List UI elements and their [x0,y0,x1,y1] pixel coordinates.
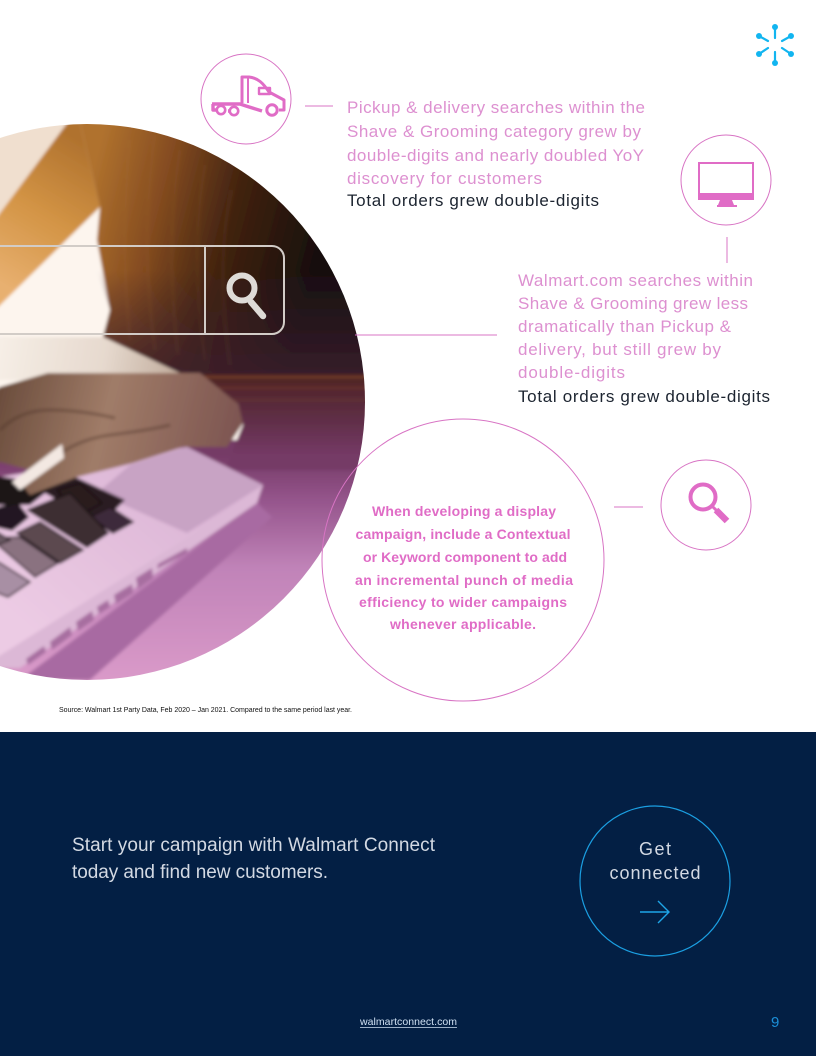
text block: walmart.com searches [518,271,770,406]
sweater ribs [218,187,233,280]
desk [0,438,357,680]
callout circle with tip: When developing a display [372,503,556,519]
icon: truck in circle [201,54,291,144]
text block: walmart.com searches: double-digits [518,363,625,382]
get connected button [580,806,730,956]
hand [0,373,243,495]
page number: 9 [771,1014,779,1031]
touchpad [97,447,263,533]
laptop deck [0,446,248,656]
callout circle with tip: efficiency to wider campaigns [359,594,567,610]
footer call to action text [72,835,436,883]
callout circle with tip: an incremental punch of media [355,572,573,588]
get connected button: Get [639,839,671,859]
laptop side with ports [0,485,263,668]
connector [355,334,497,336]
white key between fingers [12,444,64,490]
sleeve [0,124,103,308]
desk shadow [20,503,272,680]
connector [726,237,728,263]
text block: walmart.com searches: Walmart.com searches within [518,271,753,290]
footer call to action text: Start your campaign with Walmart Connect [72,835,436,856]
text block: walmart.com searches: delivery, but still grew by [518,340,722,359]
website link: walmartconnect.com [359,1016,457,1028]
connector [305,105,333,107]
laptop ports [26,548,187,665]
text block: walmart.com searches: Shave & Grooming grew less [518,294,748,313]
text block: pickup and delivery: discovery for customers [347,169,542,188]
source note: Source: Walmart 1st Party Data, Feb 2020 – Jan 2021. Compared to the same period last year. [59,707,352,714]
icon: magnifier in circle [661,460,751,550]
text block: pickup and delivery: Total orders grew double-digits [347,191,599,210]
photo backdrop [0,206,246,443]
footer call to action text: today and find new customers. [72,862,328,883]
search bar magnifier [230,276,263,316]
photo: hands typing on a laptop with search bar overlay [0,124,365,680]
text block: walmart.com searches: Total orders grew double-digits [518,387,770,406]
text block: walmart.com searches: dramatically than Pickup & [518,317,732,336]
keys [0,475,133,597]
text block: pickup and delivery [347,98,645,210]
sweater body [77,124,364,376]
callout circle with tip: or Keyword component to add [363,549,567,565]
table [0,337,195,380]
text block: pickup and delivery: Shave & Grooming category grew by [347,122,642,141]
arrow [640,901,669,923]
footer panel [0,732,816,1056]
search bar [0,246,284,334]
icon: monitor in circle [681,135,771,225]
connector [614,506,643,508]
callout circle with tip [322,419,604,701]
text block: pickup and delivery: Pickup & delivery searches within the [347,98,645,117]
get connected button: connected [610,863,700,883]
logo: blue spark [756,24,794,66]
callout circle with tip: campaign, include a Contextual [356,526,570,542]
cuff [204,373,365,469]
text block: pickup and delivery: double-digits and nearly doubled YoY [347,146,644,165]
callout circle with tip: whenever applicable. [389,616,536,632]
